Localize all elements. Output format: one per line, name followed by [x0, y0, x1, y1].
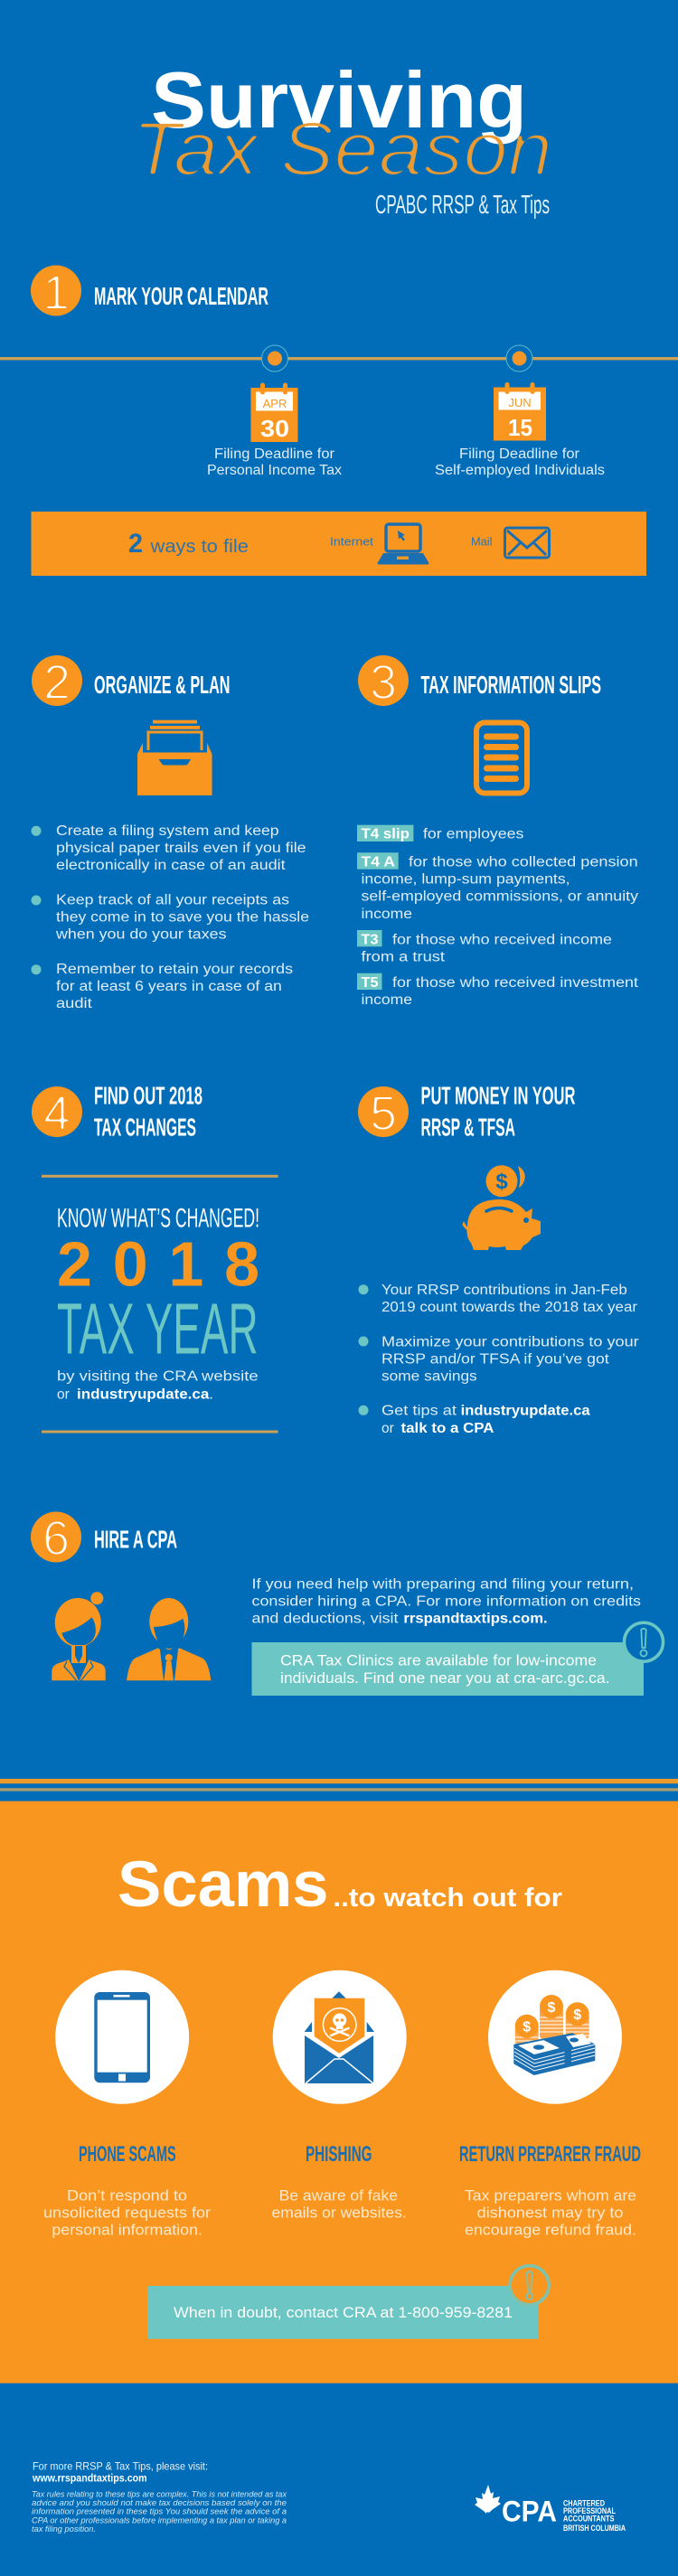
callout: contact CRA: When in doubt, contact CRA at 1-800-959-8281	[174, 2304, 513, 2321]
panel: scams	[0, 1801, 678, 2383]
deadline text: self-employed: Filing Deadline for	[459, 447, 579, 462]
bullet list: RRSP tips: or	[381, 1421, 394, 1436]
slip: T5: for those who received investment	[392, 975, 639, 991]
phishing heading: PHISHING	[306, 2142, 372, 2167]
phone scams heading: PHONE SCAMS	[79, 2142, 176, 2167]
phone scams text: personal information.	[52, 2223, 202, 2239]
paragraph: hire a CPA: If you need help with preparing and filing your return,	[251, 1576, 634, 1592]
heading 4	[94, 1082, 202, 1142]
section 3: tax information slips	[357, 655, 639, 1008]
deadline text: self-employed	[435, 447, 605, 478]
section 6: hire a CPA	[31, 1511, 664, 1696]
number badge 2: 2	[43, 655, 71, 710]
bullet list: RRSP tips: Maximize your contributions to your	[381, 1334, 639, 1349]
return preparer fraud text	[465, 2187, 636, 2239]
mail label: Mail	[471, 535, 493, 548]
section 4: find out 2018 tax changes	[32, 1082, 278, 1434]
deadline text: self-employed: Self-employed Individuals	[435, 463, 605, 478]
footer: disclaimer: Tax rules relating to these tips are complex. This is not intended as tax	[32, 2490, 287, 2500]
footer: disclaimer: information presented in these tips You should seek the advice of a	[32, 2507, 287, 2517]
bullet list: RRSP tips: talk to a CPA	[401, 1421, 494, 1436]
footer: disclaimer: advice and you should not make tax decisions based solely on the	[32, 2498, 287, 2508]
icon: maple leaf	[475, 2485, 501, 2514]
heading 6: HIRE A CPA	[94, 1525, 177, 1553]
heading 5: PUT MONEY IN YOUR	[421, 1082, 575, 1110]
callout: know what's changed: or	[57, 1387, 70, 1402]
icon: envelope	[504, 528, 550, 558]
timeline	[0, 345, 678, 371]
divider stripes	[0, 1779, 678, 1791]
callout: know what's changed: KNOW WHAT’S CHANGED!	[57, 1203, 259, 1233]
number badge 5: 5	[370, 1086, 397, 1141]
number badge 3: 3	[370, 655, 397, 710]
heading 2: ORGANIZE & PLAN	[94, 671, 231, 699]
bullet list: organize tips: Create a filing system and keep	[56, 823, 279, 839]
icon: money and coins: $	[523, 2019, 531, 2035]
scam column: phone scams	[43, 1970, 212, 2239]
bullet list: RRSP tips: 2019 count towards the 2018 tax year	[381, 1300, 637, 1315]
panel: 2 ways to file	[31, 512, 646, 576]
icon: slip document	[476, 723, 527, 794]
footer: more tips: For more RRSP & Tax Tips, please visit:	[33, 2460, 208, 2473]
bullet list: RRSP tips: RRSP and/or TFSA if you’ve got	[381, 1351, 609, 1367]
bullet list: organize tips: Remember to retain your records	[56, 962, 293, 977]
logo wordmark: ACCOUNTANTS	[563, 2514, 614, 2523]
bullet list: RRSP tips: Your RRSP contributions in Jan-Feb	[381, 1283, 627, 1298]
ways to file text	[128, 529, 249, 559]
deadline text: personal: Personal Income Tax	[207, 463, 342, 478]
footer: more tips	[32, 2460, 208, 2484]
heading 5: RRSP & TFSA	[421, 1114, 515, 1142]
deadline text: personal	[207, 447, 342, 478]
number badge 4	[32, 1086, 82, 1141]
slip: T4A: self-employed commissions, or annuity	[362, 889, 638, 905]
internet label: Internet	[330, 535, 373, 548]
slip: T4A	[357, 852, 638, 922]
slip: T3	[357, 930, 612, 964]
section 1: mark your calendar	[31, 266, 268, 320]
icon: exclamation	[624, 1622, 664, 1661]
ways to file text: ways to file	[149, 537, 249, 557]
heading 4: TAX CHANGES	[94, 1114, 196, 1142]
phishing text: Be aware of fake	[279, 2187, 398, 2204]
number badge 6: 6	[42, 1511, 70, 1565]
bullet list: organize tips: Keep track of all your receipts as	[56, 893, 289, 908]
icon: calendar june 15: 15	[508, 414, 532, 441]
bullet list: organize tips: when you do your taxes	[55, 927, 227, 943]
scam column: phishing	[271, 1970, 407, 2221]
slip: T4A: T4 A	[362, 855, 395, 870]
icon: calendar april 30: APR	[263, 397, 287, 410]
phone scams text: unsolicited requests for	[43, 2205, 212, 2221]
bullet list: RRSP tips: Get tips at	[381, 1404, 457, 1419]
slip: T4A: for those who collected pension	[409, 855, 638, 870]
icon: money and coins	[488, 1970, 622, 2104]
icon: money and coins: $	[548, 2000, 556, 2016]
slip: T5	[357, 973, 639, 1008]
slip: T3: from a trust	[362, 949, 446, 964]
slip: T4: for employees	[423, 827, 524, 842]
return preparer fraud text: encourage refund fraud.	[465, 2223, 636, 2239]
bullet list: RRSP tips: some savings	[381, 1369, 477, 1385]
callout: contact CRA	[147, 2266, 549, 2339]
icon: money and coins: $	[573, 2007, 581, 2023]
icon: exclamation	[510, 2266, 549, 2305]
bullet list: organize tips: physical paper trails even if you file	[56, 841, 306, 856]
paragraph: hire a CPA	[251, 1576, 641, 1626]
scams heading	[118, 1849, 562, 1921]
slip: T5: T5	[362, 975, 379, 991]
footer: disclaimer: CPA or other professionals before implementing a tax plan or taking a	[32, 2515, 287, 2525]
icon: man accountant	[127, 1598, 211, 1680]
callout: CRA tax clinics: CRA Tax Clinics are available for low-income	[280, 1653, 597, 1669]
number badge 6	[31, 1511, 81, 1565]
icon: phone	[55, 1970, 189, 2104]
bullet list: organize tips	[31, 823, 309, 1011]
bullet list: RRSP tips	[358, 1283, 639, 1436]
phishing text	[271, 2187, 407, 2221]
heading 4: FIND OUT 2018	[94, 1082, 202, 1110]
return preparer fraud text: Tax preparers whom are	[465, 2187, 636, 2204]
title: Surviving	[151, 55, 527, 145]
icon: calendar june 15: JUN	[508, 396, 532, 409]
icon: file box	[137, 720, 212, 795]
slip: T4	[357, 825, 524, 842]
icon: piggy bank	[463, 1165, 541, 1250]
slip: T4A: income	[362, 907, 412, 922]
number badge 4: 4	[43, 1086, 71, 1141]
phone scams text: Don’t respond to	[67, 2187, 187, 2204]
logo: CPA British Columbia	[475, 2485, 626, 2533]
deadline text: personal: Filing Deadline for	[214, 447, 334, 462]
footer: more tips: www.rrspandtaxtips.com	[32, 2471, 147, 2484]
paragraph: hire a CPA: rrspandtaxtips.com.	[403, 1611, 548, 1626]
paragraph: hire a CPA: consider hiring a CPA. For more information on credits	[251, 1594, 641, 1609]
section 2: organize and plan	[31, 655, 309, 1011]
number badge 2	[32, 655, 82, 710]
paragraph: hire a CPA: and deductions, visit	[251, 1611, 399, 1626]
icon: calendar april 30: 30	[260, 415, 289, 442]
logo wordmark: CHARTERED	[563, 2499, 605, 2508]
callout: know what's changed: by visiting the CRA website	[57, 1369, 259, 1385]
callout: know what's changed: industryupdate.ca .	[77, 1387, 213, 1402]
callout: CRA tax clinics	[251, 1622, 664, 1696]
ways to file text: 2	[128, 529, 143, 559]
logo wordmark	[563, 2499, 626, 2533]
number badge 1	[31, 266, 81, 320]
number badge 5	[358, 1086, 409, 1141]
number badge 3	[358, 655, 409, 710]
callout: know what's changed: TAX YEAR	[57, 1288, 259, 1368]
subtitle: CPABC RRSP & Tax Tips	[375, 191, 550, 220]
slip: T3: for those who received income	[392, 932, 612, 947]
phishing text: emails or websites.	[271, 2205, 407, 2221]
bullet list: organize tips: electronically in case of an audit	[56, 858, 286, 873]
callout: know what's changed: 2018	[57, 1229, 259, 1300]
bullet list: organize tips: for at least 6 years in case of an	[56, 979, 282, 994]
icon: woman accountant	[52, 1592, 106, 1681]
heading 1: MARK YOUR CALENDAR	[94, 282, 268, 310]
title	[132, 55, 552, 192]
scam column: return preparer fraud	[459, 1970, 641, 2239]
heading 5	[421, 1082, 575, 1142]
return preparer fraud text: dishonest may try to	[477, 2205, 624, 2221]
slip: T3: T3	[362, 932, 379, 947]
bullet list: organize tips: they come in to save you the hassle	[56, 910, 309, 926]
bullet list: organize tips: audit	[56, 996, 93, 1011]
title: Tax Season	[132, 107, 552, 192]
footer: disclaimer: tax filing position.	[32, 2524, 96, 2534]
section 5: put money in your RRSP and TFSA	[358, 1082, 639, 1436]
logo wordmark: BRITISH COLUMBIA	[563, 2524, 626, 2533]
slip: T4A: income, lump-sum payments,	[362, 872, 570, 888]
icon: calendar june 15	[494, 382, 546, 441]
phone scams text	[43, 2187, 212, 2239]
footer: disclaimer	[32, 2490, 287, 2534]
callout: CRA tax clinics: individuals. Find one near you at cra-arc.gc.ca.	[280, 1670, 610, 1687]
bullet list: RRSP tips: industryupdate.ca	[461, 1404, 590, 1419]
callout: know what's changed	[42, 1175, 278, 1434]
icon: piggy bank: $	[495, 1170, 508, 1194]
scams heading: ..to watch out for	[333, 1884, 562, 1913]
icon: calendar april 30	[251, 383, 298, 442]
slip: T5: income	[362, 992, 412, 1008]
slip: T4: T4 slip	[362, 827, 410, 842]
icon: laptop	[378, 524, 428, 564]
logo wordmark: PROFESSIONAL	[563, 2506, 616, 2515]
icon: phishing envelope	[273, 1970, 407, 2104]
logo: CPA British Columbia: CPA	[502, 2495, 557, 2527]
number badge 1: 1	[42, 266, 70, 320]
scams heading: Scams	[118, 1849, 329, 1921]
